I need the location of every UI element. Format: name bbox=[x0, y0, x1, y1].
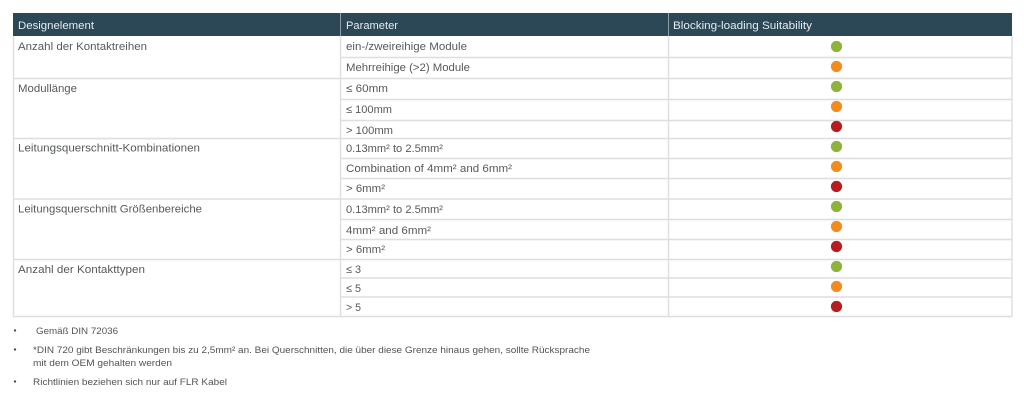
parameter column: Combination of 4mm² and 6mm² bbox=[346, 163, 512, 175]
design element column: Anzahl der Kontakttypen bbox=[18, 264, 145, 276]
parameter column: Mehrreihige (>2) Module bbox=[346, 62, 470, 74]
design element column: Leitungsquerschnitt-Kombinationen bbox=[18, 142, 200, 154]
header row bbox=[13, 13, 1012, 36]
parameter column: ≤ 5 bbox=[346, 283, 361, 295]
parameter column bbox=[346, 41, 512, 314]
table bbox=[13, 13, 1012, 317]
design element column bbox=[18, 41, 202, 276]
parameter column: ≤ 100mm bbox=[346, 104, 392, 116]
footnotes bbox=[14, 326, 590, 387]
parameter column: 4mm² and 6mm² bbox=[346, 225, 431, 237]
footnote: cross-section limit: *DIN 720 gibt Beschränkungen bis zu 2,5mm² an. Bei Querschnitten, die über diese Grenze hinaus gehen, sollte Rücksprache bbox=[33, 345, 590, 355]
footnote: FLR cables: Richtlinien beziehen sich nur auf FLR Kabel bbox=[33, 377, 227, 387]
footnote: standard: Gemäß DIN 72036 bbox=[36, 326, 118, 336]
parameter column: ≤ 60mm bbox=[346, 83, 388, 95]
design element column: Modullänge bbox=[18, 83, 77, 95]
table grid bbox=[13, 36, 1012, 317]
parameter column: > 5 bbox=[346, 302, 361, 314]
parameter column: 0.13mm² to 2.5mm² bbox=[346, 204, 443, 216]
design element column: Anzahl der Kontaktreihen bbox=[18, 41, 147, 53]
parameter column: ein-/zweireihige Module bbox=[346, 41, 467, 53]
header row: Designelement bbox=[18, 20, 94, 32]
parameter column: 0.13mm² to 2.5mm² bbox=[346, 143, 443, 155]
parameter column: ≤ 3 bbox=[346, 264, 361, 276]
footnote: cross-section limit: mit dem OEM gehalten werden bbox=[33, 358, 172, 368]
design element column: Leitungsquerschnitt Größenbereiche bbox=[18, 204, 202, 216]
footnote: cross-section limit bbox=[14, 345, 590, 368]
parameter column: > 100mm bbox=[346, 125, 393, 137]
parameter column: > 6mm² bbox=[346, 244, 385, 256]
header row: Parameter bbox=[346, 20, 398, 32]
suitability indicator dots bbox=[831, 41, 842, 312]
parameter column: > 6mm² bbox=[346, 183, 385, 195]
header row: Blocking-loading Suitability bbox=[673, 20, 813, 32]
